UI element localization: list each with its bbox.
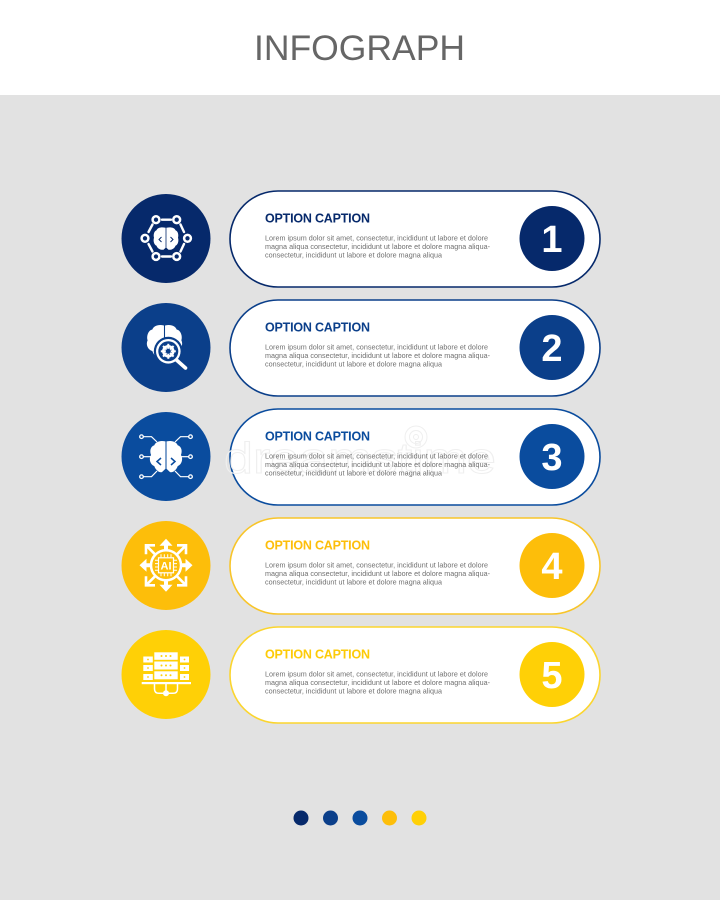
body text 4: magna aliqua consectetur, incididunt ut labore et dolore magna aliqua-	[265, 569, 491, 578]
number badge 3: 3	[541, 437, 563, 479]
number badge 1	[520, 206, 584, 271]
body text 4: consectetur, incididunt ut labore et dolore magna aliqua	[265, 578, 442, 586]
body text 3: Lorem ipsum dolor sit amet, consectetur, incididunt ut labore et dolore	[265, 452, 488, 460]
body text 3	[265, 452, 491, 478]
body text 1: consectetur, incididunt ut labore et dolore magna aliqua	[265, 250, 442, 260]
panel: option 4	[230, 518, 600, 614]
body text 2: consectetur, incididunt ut labore et dolore magna aliqua	[265, 360, 442, 368]
pagination dots	[294, 810, 426, 826]
pill outline 5	[230, 627, 600, 723]
icon: brain circuit	[122, 412, 210, 501]
pill outline 3	[230, 409, 600, 505]
body text 1: magna aliqua consectetur, incididunt ut labore et dolore magna aliqua-	[265, 242, 491, 251]
panel: option 5	[230, 627, 600, 723]
number badge 4: 4	[541, 546, 563, 588]
caption 4: OPTION CAPTION	[265, 538, 370, 552]
panel: option 2	[230, 300, 600, 396]
icon: brain with magnifier and gear	[122, 303, 210, 392]
body text 3: consectetur, incididunt ut labore et dolore magna aliqua	[265, 468, 442, 478]
pill outline 2	[230, 300, 600, 396]
number badge 5	[520, 642, 584, 707]
icon: AI chip with arrows	[122, 521, 210, 610]
number badge 3	[520, 424, 584, 489]
number badge 2	[520, 315, 584, 380]
pill outline 1	[230, 191, 600, 287]
pill outline 4	[230, 518, 600, 614]
panel: option 1	[230, 191, 600, 287]
number badge 4	[520, 533, 584, 598]
body text 5: Lorem ipsum dolor sit amet, consectetur, incididunt ut labore et dolore	[265, 670, 488, 678]
icon: brain network	[122, 194, 210, 283]
number badge 2: 2	[541, 328, 563, 370]
title: INFOGRAPH	[254, 28, 465, 68]
number badge 1: 1	[541, 219, 563, 261]
icon: server racks	[122, 630, 210, 719]
number badge 5: 5	[541, 655, 563, 697]
body text 5: consectetur, incididunt ut labore et dolore magna aliqua	[265, 686, 442, 696]
body text 4	[265, 560, 491, 586]
caption 2: OPTION CAPTION	[265, 320, 370, 334]
body text 5: magna aliqua consectetur, incididunt ut labore et dolore magna aliqua-	[265, 678, 491, 687]
body text 2: magna aliqua consectetur, incididunt ut labore et dolore magna aliqua-	[265, 351, 491, 360]
body text 3: magna aliqua consectetur, incididunt ut labore et dolore magna aliqua-	[265, 460, 491, 469]
caption 1: OPTION CAPTION	[265, 212, 370, 226]
panel: option 3	[224, 409, 600, 505]
body text 5	[265, 670, 491, 696]
body text 2: Lorem ipsum dolor sit amet, consectetur, incididunt ut labore et dolore	[265, 342, 488, 352]
body text 2	[265, 342, 491, 368]
icon: AI chip with arrows: AI	[160, 560, 172, 572]
body text 1	[265, 234, 491, 260]
caption 3: OPTION CAPTION	[265, 430, 370, 444]
body text 1: Lorem ipsum dolor sit amet, consectetur, incididunt ut labore et dolore	[265, 234, 488, 242]
watermark: dreamstime	[224, 434, 496, 483]
body text 4: Lorem ipsum dolor sit amet, consectetur, incididunt ut labore et dolore	[265, 560, 488, 570]
caption 5: OPTION CAPTION	[265, 648, 370, 662]
